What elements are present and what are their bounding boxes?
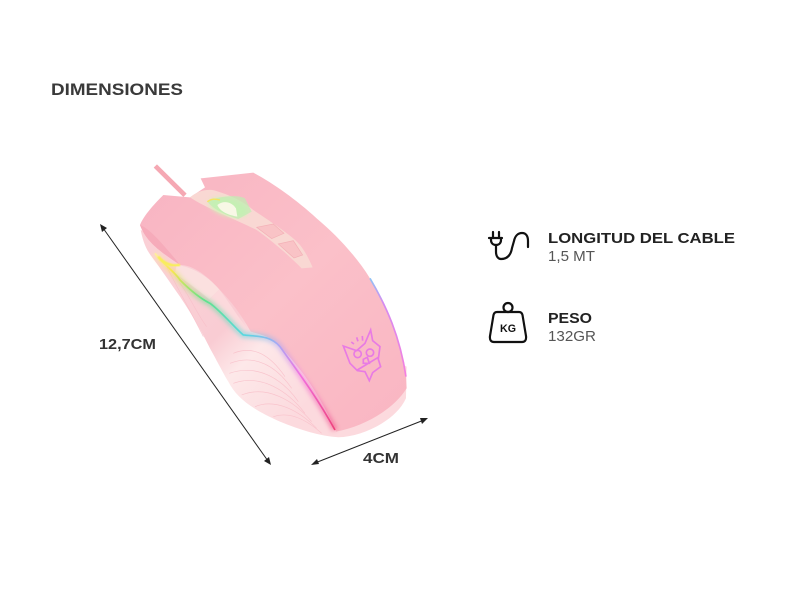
cable [155, 166, 185, 195]
text: cable length [548, 230, 735, 265]
mouse illustration [140, 166, 407, 437]
RGB glow [155, 253, 335, 430]
dimension arrow: width [311, 418, 428, 465]
yellow highlight [158, 257, 180, 265]
DPI buttons [257, 224, 303, 258]
RGB light strip [155, 253, 335, 430]
dimension arrow: length [100, 224, 271, 465]
text: weight: PESO [548, 310, 592, 327]
icon: weight: KG [500, 323, 516, 335]
side button [175, 265, 219, 299]
text: cable length: LONGITUD DEL CABLE [548, 230, 735, 247]
text: cable length: 1,5 MT [548, 248, 595, 265]
text: weight [548, 310, 596, 345]
left shadow shading [140, 225, 180, 265]
label: length: 12,7CM [99, 336, 156, 353]
mouse skirt [141, 230, 407, 437]
right RGB edge [370, 278, 406, 377]
side ribbing [167, 267, 322, 433]
scroll wheel [207, 196, 252, 219]
mouse body [140, 173, 407, 432]
icon: plug and cable [489, 232, 528, 259]
scroll wheel glow [207, 194, 250, 221]
title: DIMENSIONES [51, 80, 183, 99]
text: weight: 132GR [548, 328, 596, 345]
icon: weight [490, 303, 526, 342]
button panel [190, 190, 313, 268]
label: width: 4CM [363, 450, 399, 467]
logo [343, 330, 381, 381]
